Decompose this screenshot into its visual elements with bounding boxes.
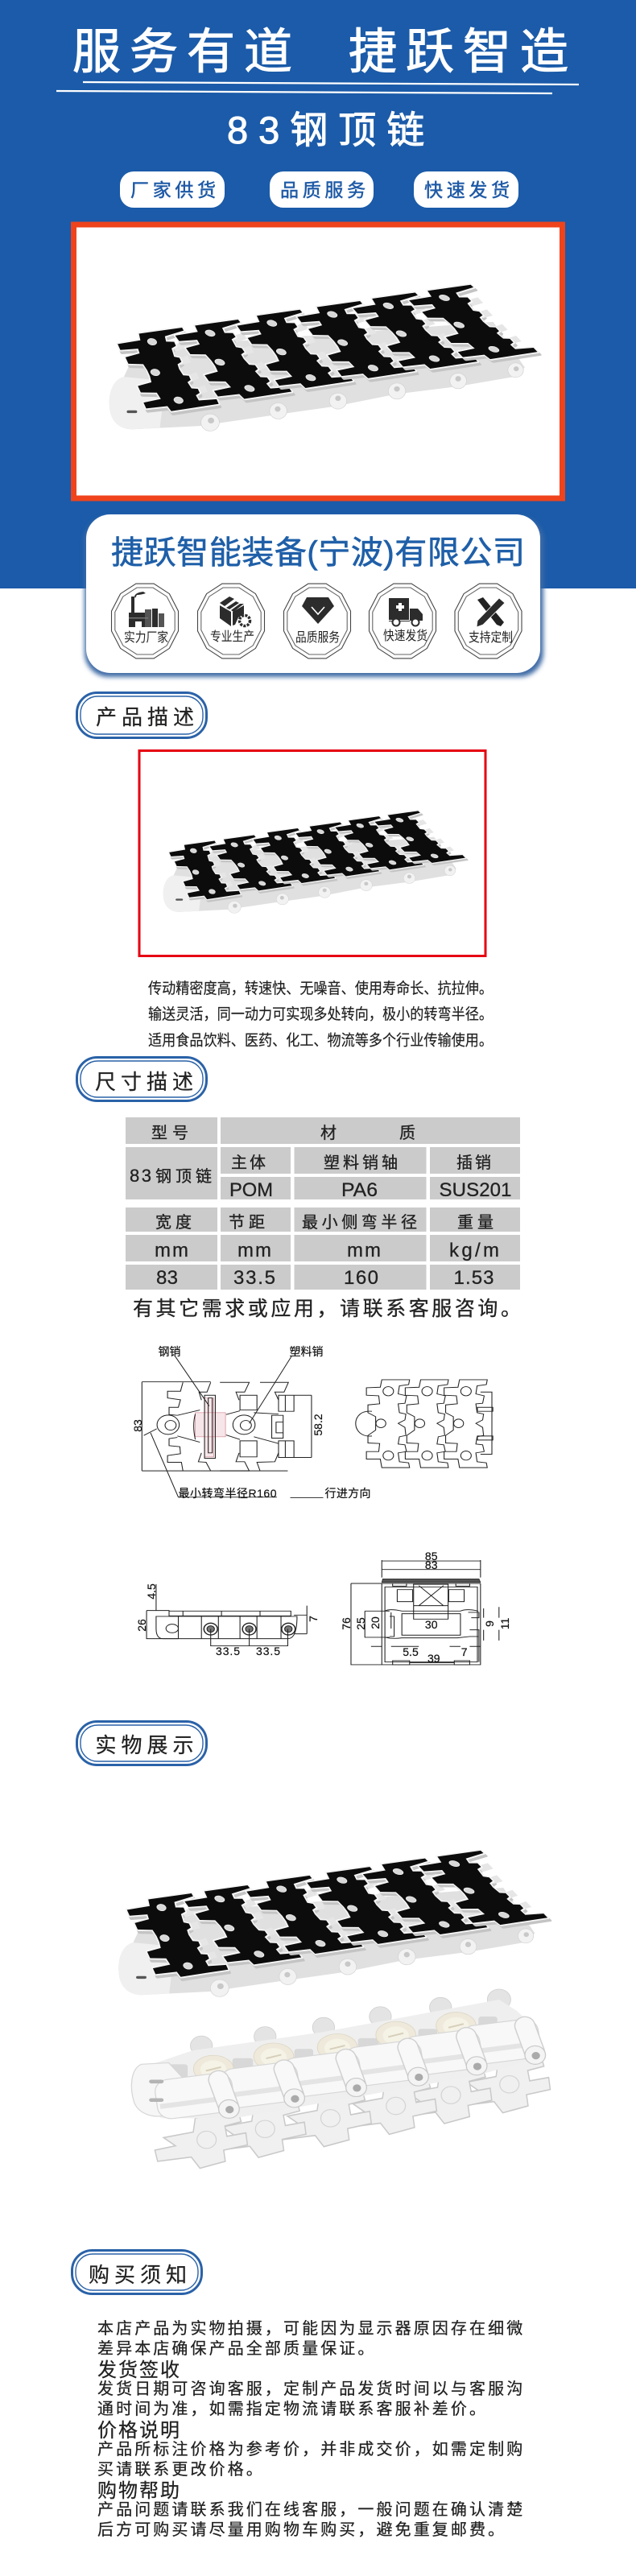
technical drawing: top view with pins: 塑料销 — [290, 1345, 324, 1358]
specification table: 材 — [320, 1124, 337, 1142]
heading: purchase notes: 购买须知 — [89, 2263, 192, 2287]
technical drawing: cross-section view: 9 — [483, 1620, 496, 1627]
technical drawing: top view with pins: 行进方向 — [325, 1487, 370, 1500]
specification table: 节距 — [229, 1213, 269, 1232]
badge: customization — [455, 584, 522, 658]
technical drawing: cross-section view: 11 — [498, 1618, 511, 1629]
specification table: 塑料销轴 — [324, 1154, 401, 1172]
technical drawing: cross-section view: 76 — [340, 1617, 353, 1630]
specification table: 型号 — [151, 1124, 193, 1142]
specification table: 83 — [156, 1267, 178, 1289]
title: slogan: 捷跃智造 — [349, 25, 577, 79]
specification table: PA6 — [341, 1179, 378, 1201]
title: slogan — [72, 25, 577, 79]
technical drawing: bottom plate view — [356, 1380, 493, 1468]
purchase notes text: 购物帮助 — [97, 2480, 181, 2502]
specification table: mm — [237, 1240, 271, 1261]
technical drawing: top view with pins: 最小转弯半径R160 — [179, 1487, 277, 1500]
specification table: kg/m — [449, 1240, 499, 1261]
badge: professional production — [198, 584, 264, 658]
specification table: mm — [155, 1240, 188, 1261]
technical drawing: cross-section view: 39 — [427, 1652, 440, 1665]
technical drawing: cross-section view: 30 — [425, 1618, 438, 1631]
title underline double rule — [56, 82, 579, 93]
specification table: 最小侧弯半径 — [302, 1213, 421, 1232]
badge: fast shipping: 快速发货 — [383, 629, 427, 643]
company name: 捷跃智能装备(宁波)有限公司 — [111, 535, 525, 571]
specification table: 钢顶链 — [155, 1167, 216, 1186]
technical drawing: side view: 4.5 — [145, 1583, 158, 1600]
specification table: mm — [347, 1240, 381, 1261]
technical drawing: top view with pins: 58.2 — [312, 1414, 324, 1436]
badge: fast shipping — [369, 584, 436, 658]
heading: dimensions — [77, 1058, 206, 1101]
heading: real product display — [77, 1721, 206, 1765]
specification table: POM — [229, 1179, 273, 1201]
badge: customization: 支持定制 — [469, 630, 513, 645]
specification table: 1.53 — [454, 1267, 494, 1289]
purchase notes text: 通时间为准，如需指定物流请联系客服补差价。 — [97, 2400, 488, 2418]
blue header background — [0, 0, 636, 588]
technical drawing: top view with pins — [131, 1345, 370, 1500]
technical drawing: cross-section view: 5.5 — [403, 1645, 419, 1658]
technical drawing: side view: 33.5 — [216, 1645, 240, 1657]
badge: strong factory — [111, 584, 179, 658]
title: slogan: 服务有道 — [72, 25, 301, 79]
purchase notes text — [97, 2319, 525, 2539]
pill: factory supply — [120, 171, 225, 208]
badge: professional production: 专业生产 — [210, 630, 254, 644]
purchase notes text: 发货日期可咨询客服，定制产品发货时间以与客服沟 — [97, 2380, 525, 2398]
specification table: 83 — [130, 1166, 153, 1186]
description text — [148, 980, 493, 1050]
product photo: underside of white chain — [131, 1989, 550, 2168]
heading: product description: 产品描述 — [96, 705, 199, 729]
service pills — [120, 171, 518, 208]
company card — [85, 514, 543, 677]
pill: fast shipping: 快速发货 — [424, 180, 514, 200]
description text: 输送灵活，同一动力可实现多处转向，极小的转弯半径。 — [148, 1005, 493, 1023]
specification table: 160 — [344, 1267, 378, 1289]
technical drawing: cross-section view: 83 — [425, 1558, 438, 1571]
heading: dimensions: 尺寸描述 — [95, 1070, 198, 1094]
technical drawing: side view — [135, 1583, 320, 1657]
technical drawing: cross-section view — [340, 1550, 511, 1665]
hero product image panel — [74, 225, 562, 498]
product photo: top side of chain — [118, 1851, 551, 1996]
technical drawing: top view with pins: 钢销 — [158, 1345, 180, 1358]
specification table: 插销 — [456, 1154, 494, 1172]
technical drawing: side view: 33.5 — [256, 1645, 280, 1657]
purchase notes text: 发货签收 — [97, 2359, 181, 2381]
specification table: SUS201 — [440, 1179, 512, 1201]
badge: strong factory: 实力厂家 — [124, 630, 168, 645]
purchase notes text: 买请联系更改价格。 — [97, 2460, 265, 2479]
badge: quality service: 品质服务 — [295, 630, 340, 645]
specification table: 33.5 — [233, 1267, 275, 1289]
specification table: 宽度 — [155, 1213, 196, 1232]
technical drawing: cross-section view: 85 — [425, 1550, 438, 1563]
pill: factory supply: 厂家供货 — [130, 180, 220, 200]
specification table: 主体 — [231, 1154, 268, 1172]
technical drawing: top view with pins: 83 — [131, 1419, 144, 1432]
purchase notes text: 价格说明 — [97, 2420, 181, 2442]
badge: quality service — [283, 584, 351, 658]
purchase notes text: 产品所标注价格为参考价，并非成交价，如需定制购 — [97, 2440, 525, 2458]
purchase notes text: 差异本店确保产品全部质量保证。 — [97, 2339, 377, 2358]
pill: quality service: 品质服务 — [280, 180, 370, 200]
technical drawing: cross-section view: 20 — [369, 1616, 382, 1629]
heading: purchase notes — [72, 2251, 201, 2294]
product title: 83钢顶链 — [227, 109, 435, 151]
technical drawing: side view: 26 — [135, 1619, 148, 1632]
description text: 传动精密度高，转速快、无噪音、使用寿命长、抗拉伸。 — [148, 980, 493, 997]
technical drawing: side view: 7 — [307, 1616, 320, 1622]
product description image panel — [139, 750, 485, 956]
pill: quality service — [270, 171, 374, 208]
purchase notes text: 本店产品为实物拍摄，可能因为显示器原因存在细微 — [97, 2319, 525, 2338]
specification table — [126, 1117, 520, 1290]
specification table: 质 — [399, 1124, 415, 1142]
purchase notes text: 产品问题请联系我们在线客服，一般问题在确认清楚 — [97, 2500, 525, 2519]
pill: fast shipping — [414, 171, 518, 208]
heading: real product display: 实物展示 — [95, 1733, 199, 1757]
purchase notes text: 后方可购买请尽量用购物车购买，避免重复邮费。 — [97, 2520, 506, 2539]
technical drawing: cross-section view: 7 — [461, 1645, 468, 1658]
specification table: 重量 — [457, 1213, 498, 1232]
heading: product description — [77, 692, 206, 737]
description text: 适用食品饮料、医药、化工、物流等多个行业传输使用。 — [148, 1032, 493, 1050]
technical drawing: cross-section view: 25 — [354, 1617, 367, 1630]
contact note: 有其它需求或应用，请联系客服咨询。 — [133, 1298, 521, 1320]
